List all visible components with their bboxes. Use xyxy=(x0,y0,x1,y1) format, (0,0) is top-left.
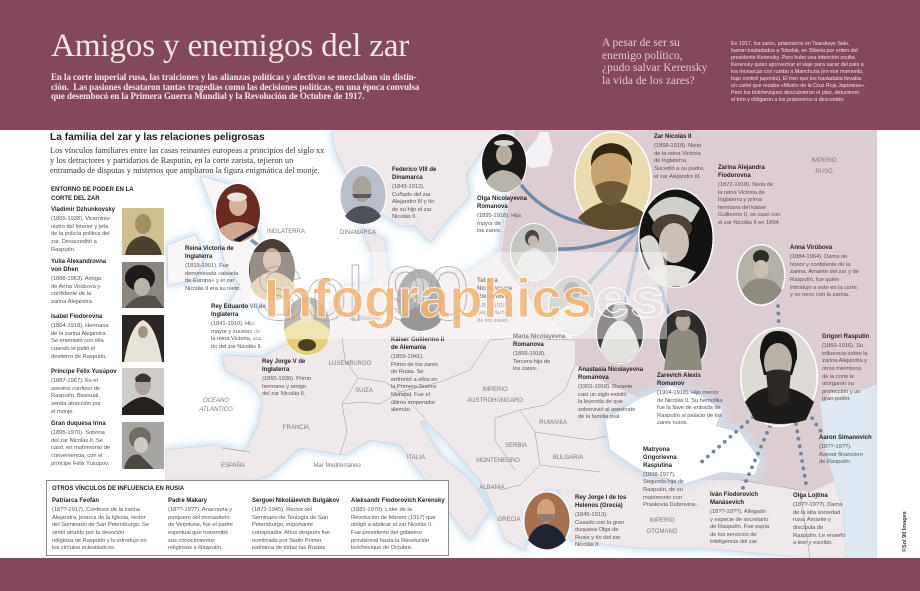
map labels: SERBIA xyxy=(505,443,527,449)
map labels: AUSTROHÚNGARO xyxy=(467,398,523,404)
profile: Feofán: religiosa de Rasputín y lo introdujo en xyxy=(52,538,147,544)
profile: Félix: sentía atracción por xyxy=(51,401,101,407)
profile: Makary: sus conocimientos xyxy=(168,538,215,544)
profile: Yulia xyxy=(51,258,106,305)
portrait: Isabel xyxy=(122,315,164,362)
profile: Makary: de Verjoturie, fue el padre xyxy=(168,522,233,528)
profile: Yulia: Yulia Alexandrovna xyxy=(51,259,106,265)
intro text: que desembocó en la Primera Guerra Mundial y la Revolución de Octubre de 1917. xyxy=(51,91,364,101)
bio: Alexis: Romanov xyxy=(657,381,684,387)
profile: Makary: Padre Makary xyxy=(168,498,207,504)
bio: María: los zares. xyxy=(513,366,537,372)
bio: Tatiana: de los zares. xyxy=(477,318,509,324)
profile: Dzhunkovsky: Vladimir Dzhunkovsky xyxy=(51,207,115,213)
panel heading: CORTE DEL ZAR xyxy=(51,196,100,202)
portrait: Olga Nicolayevna xyxy=(481,133,527,193)
bio: Iván xyxy=(710,492,770,545)
profile: Yulia: (1888-1963). Amiga xyxy=(51,276,101,282)
question: ¿pudo salvar Kerensky xyxy=(602,62,707,74)
portrait: Reina Victoria xyxy=(214,182,262,244)
bio: Aaron xyxy=(819,434,872,465)
bio: Alexis: de Nicolás II. Su hemofilia xyxy=(657,398,722,404)
bio: Olga Lojtina xyxy=(793,492,846,546)
bio: Anastasia: Romanova xyxy=(578,375,609,381)
bio: Alejandra: hermana del káiser xyxy=(718,205,766,211)
bio: Jorge I: Casado con la gran xyxy=(575,520,624,526)
map labels: ALEMANIA xyxy=(350,316,380,322)
credit: ©Sol 90 Images xyxy=(902,511,908,552)
bio: Federico VIII: Nicolás II. xyxy=(392,214,417,220)
watermark: Infographics xyxy=(264,267,592,329)
portrait: Rey Eduardo VII xyxy=(248,238,296,302)
panel heading xyxy=(51,186,134,202)
bio: Aaron: de Rasputín. xyxy=(819,459,851,465)
bio: Jorge V: hermano y amigo xyxy=(262,384,306,390)
bio: Olga Lojtina: (18??-19??). Dama xyxy=(793,502,842,508)
profile: Kerensky: (1881-1970). Líder de la xyxy=(351,507,412,513)
bio: Alejandra: la reina Victoria de xyxy=(718,190,765,196)
bottom band xyxy=(0,558,920,591)
bio: Iván: de Rasputín. Fue espía xyxy=(710,524,769,530)
profile: Bulgákov: Serguei Nikoláievich Bulgákov xyxy=(252,498,339,504)
bio: Eduardo VII: (1841-1910). Hijo xyxy=(211,321,255,327)
bio: Alexis: (1904-1918). Hijo menor xyxy=(657,390,719,396)
bio: Rasputín: Grigori Rasputín xyxy=(822,334,869,340)
bio: Tatiana: Romanova xyxy=(477,294,508,300)
portrait: Káiser Guillermo II xyxy=(396,268,444,332)
profile: Feofán: Alejandra, jerarca de la Iglesia, rector xyxy=(52,515,146,521)
bio: Anna: y se nexo con la zarina. xyxy=(790,292,850,298)
bio: Jorge I: duquesa Olga de xyxy=(575,527,618,533)
intro text xyxy=(51,72,420,101)
bio: Rasputín: protección y un xyxy=(822,389,860,395)
profile: Makary xyxy=(168,498,233,551)
profile: Félix: (1887-1967). Es el xyxy=(51,378,98,384)
bio: Iván: Manásevich xyxy=(710,500,744,506)
bio: Jorge V: (1865-1936). Primo xyxy=(262,376,311,382)
section heading: La familia del zar y las relaciones peligrosas xyxy=(50,132,265,143)
bio: María: María Nicolayevna xyxy=(513,334,565,340)
bio: Guillermo II: la Primera Guerra xyxy=(391,384,436,390)
profile: Dzhunkovsky: (1865-1938). Viceminis- xyxy=(51,216,111,222)
bio: Tatiana: Nicolayevna xyxy=(477,286,512,292)
map labels: OTOMANO xyxy=(647,529,677,535)
map labels: MONTENEGRO xyxy=(476,458,520,464)
map labels: ESPAÑA xyxy=(221,463,245,469)
map background xyxy=(122,130,877,558)
bio: Tatiana: Segunda hija xyxy=(477,310,510,316)
profile: Félix: Rasputín. Bisexual, xyxy=(51,393,100,399)
bio: Guillermo II: alemán. xyxy=(391,407,411,413)
bio: Jorge V: del zar Nicolás II. xyxy=(262,391,305,397)
profile: Isabel: cuando le pidió el xyxy=(51,346,95,352)
portrait: Zar Nicolás II xyxy=(574,131,652,231)
bio: Alejandra xyxy=(718,164,780,226)
map labels: IMPERIO xyxy=(811,158,837,164)
question: A pesar de ser su xyxy=(602,37,680,49)
bio: Victoria: Reina Victoria de xyxy=(185,246,234,252)
portrait: Tatiana Nicolayevna xyxy=(510,223,558,281)
bio: Nicolás II: (1868-1918). Nieto xyxy=(654,143,701,149)
connectors: Rasputin dotted links xyxy=(697,306,822,490)
profile: Irina: Gran duquesa Irina xyxy=(51,421,106,427)
profile: Feofán: (18??-1917). Confesor de la zarina xyxy=(52,507,140,513)
portrait: Federico VIII xyxy=(340,165,386,225)
section intro: entramado de disputas y misterios que ampliaron la figura enigmática del monje. xyxy=(50,166,320,175)
bio: Olga Lojtina: discípula de xyxy=(793,525,823,531)
bio: Nicolás II: Sucedió a su padre, xyxy=(654,166,704,172)
bio: Jorge I: Rusia y tío del zar xyxy=(575,535,620,541)
bio: Jorge V xyxy=(262,358,311,397)
profile: Yulia: de Anna Virúbova y xyxy=(51,284,100,290)
answer text: bajo control japonés). El tren que los trasladaba llevaba xyxy=(731,76,861,82)
bio: Jorge I: (1845-1913). xyxy=(575,512,608,518)
bio: Aaron: (18??-19??). xyxy=(819,444,852,450)
bio: Victoria: Nicolás II era su nieto. xyxy=(185,286,241,292)
map labels: BULGARIA xyxy=(553,455,583,461)
bio: Aaron: Aaron Simanovich xyxy=(819,435,872,441)
bio: Anna: honor y confidente de la xyxy=(790,262,850,268)
question: la vida de los zares? xyxy=(602,75,695,87)
watermark: es xyxy=(595,267,665,329)
bio: Anastasia: Anastasia Nicolayevna xyxy=(578,367,643,373)
top band xyxy=(0,0,920,130)
bio: Jorge I xyxy=(575,494,626,548)
profile: Yulia: zarina Alejandra. xyxy=(51,299,93,305)
bio: Nicolás II xyxy=(654,134,704,180)
watermark: Sol 90 xyxy=(254,252,470,337)
bio: Matryona: Rasputín, de su xyxy=(643,487,683,493)
answer text: los monarcas con rumbo a Manchuria (en ese momento, xyxy=(731,69,864,75)
bio: María: Romanova xyxy=(513,342,544,348)
bio: Alexis: fue la llave de entrada de xyxy=(657,405,721,411)
profile: Feofán: del Seminario de San Petersburgo. Se xyxy=(52,522,149,528)
bio: Olga Lojtina: rusa. Amante y xyxy=(793,517,831,523)
bio: Matryona: (1898-1977). xyxy=(643,472,676,478)
bio: Victoria: denominada «abuela xyxy=(185,271,238,277)
panel heading: ENTORNO DE PODER EN LA xyxy=(51,187,134,193)
portrait: Grigori Rasputín xyxy=(740,327,818,427)
profile: Kerensky: Aleksandr Fiodorovich Kerensky xyxy=(351,498,445,504)
bio: Nicolás II: Zar Nicolás II xyxy=(654,134,691,140)
connector: Victoria to Eduardo xyxy=(251,240,262,248)
bio: Guillermo II xyxy=(391,336,444,413)
bio: Eduardo VII xyxy=(211,304,266,350)
map labels: RUSO xyxy=(815,169,833,175)
bio: Rasputín: otros miembros xyxy=(822,366,861,372)
bio: Anastasia: (1901-1918). Durante xyxy=(578,384,632,390)
portrait: Rey Jorge V xyxy=(283,296,331,356)
profile: Bulgákov: Seminario de Teología de San xyxy=(252,515,328,521)
profile: Félix: asesino confeso de xyxy=(51,386,100,392)
profile: Bulgákov xyxy=(252,498,340,551)
profile: Makary: espiritual que transmitió xyxy=(168,530,228,536)
portrait: María Nicolayevna xyxy=(548,276,596,336)
bio: Alejandra: Inglaterra y prima xyxy=(718,197,762,203)
bio: Olga xyxy=(477,196,527,234)
bio: Jorge I: Helenos (Grecia) xyxy=(575,503,623,509)
bio: Jorge I: Rey Jorge I de los xyxy=(575,495,626,501)
profile: Yulia: confidente de la xyxy=(51,291,91,297)
bio: Olga: Romanova xyxy=(477,204,508,210)
bio: Rasputín: de la corte le xyxy=(822,374,854,380)
bio: Guillermo II: último emperador xyxy=(391,400,435,406)
profile: Dzhunkovsky: de la policía política del xyxy=(51,231,110,237)
map labels: ALBANIA xyxy=(479,485,505,491)
portrait: Irina xyxy=(122,422,164,469)
profile: Dzhunkovsky: nistro del Interior y jefa xyxy=(51,224,108,230)
profile: Dzhunkovsky: zar. Desacreditó a xyxy=(51,239,97,245)
bio: Jorge I: Nicolás II. xyxy=(575,542,600,548)
bio: Anastasia: de la familia real. xyxy=(578,414,621,420)
profile: Isabel: Se enemistó con ella xyxy=(51,338,104,344)
portrait: Anastasia Nicolayevna xyxy=(596,302,644,364)
bio: Jorge V: Inglaterra xyxy=(262,367,289,373)
map labels: RUMANIA xyxy=(539,420,567,426)
profile: Irina: casó, en matrimonio de xyxy=(51,445,110,451)
profile: Dzhunkovsky xyxy=(51,206,115,253)
bio: Matryona xyxy=(643,446,697,508)
profile: Bulgákov: Petersburgo, importante xyxy=(252,522,313,528)
question: enemigo político, xyxy=(602,50,682,62)
profile: Kerensky: Fue presidente del gobierno xyxy=(351,530,422,536)
bio: Olga: Olga Nicolayevna xyxy=(477,196,527,202)
bio: Guillermo II: de Alemania xyxy=(391,345,426,351)
bio: Victoria: de Europa» y el zar xyxy=(185,278,234,284)
bio: Iván: de los servicios de xyxy=(710,532,757,538)
profile: Irina: príncipe Félix Yusúpov. xyxy=(51,461,109,467)
bio: Anna: (1884-1964). Dama de xyxy=(790,254,847,260)
map labels: IMPERIO xyxy=(649,518,675,524)
map labels: IMPERIO xyxy=(482,387,508,393)
bio: Guillermo II: de Rusia. Se xyxy=(391,369,424,375)
panel: entorno de poder xyxy=(51,186,134,467)
bio: Anna: zarina. Amante del zar y de xyxy=(790,269,859,275)
profile: Irina: conveniencia, con el xyxy=(51,453,102,459)
profile: Irina: (1895-1970). Sobrina xyxy=(51,430,105,436)
profile: Feofán: los círculos eclesiásticos. xyxy=(52,545,115,551)
bio: Federico VIII: Alejandro III y tío xyxy=(392,199,434,205)
bio: Victoria xyxy=(185,246,241,292)
profile: Kerensky: provisional hasta la Revolución xyxy=(351,538,429,544)
profile: Isabel: (1864-1918). Hermana xyxy=(51,323,109,329)
profile: Bulgákov: patriarca de todas las Rusias. xyxy=(252,545,327,551)
intro text: ción. Las pasiones desataron tantas tragedias como las decisiones políticas, en una época convulsa xyxy=(51,82,419,92)
map labels: INGLATERRA xyxy=(267,229,305,235)
map labels: SUIZA xyxy=(355,388,373,394)
map labels: DINAMARCA xyxy=(340,230,376,236)
profile: Félix: Príncipe Félix Yusúpov xyxy=(51,369,117,375)
bio: Olga Lojtina: a leer y escribir. xyxy=(793,540,832,546)
bio: Anna: Anna Virúbova xyxy=(790,245,832,251)
profile: Isabel: Isabel Fiodorovna xyxy=(51,314,102,320)
bio: Iván: inteligencia del zar. xyxy=(710,539,758,545)
profile: Isabel: de la zarina Alejandra. xyxy=(51,331,107,337)
panel heading: OTROS VÍNCULOS DE INFLUENCIA EN RUSIA xyxy=(52,486,184,492)
portrait: Zarina Alejandra xyxy=(638,188,714,288)
bio: María: Tercera hija de xyxy=(513,359,550,365)
bio: Eduardo VII: Rey Eduardo VII de xyxy=(211,304,266,310)
profile: Irina xyxy=(51,420,110,467)
bio: Rasputín: (1869-1916). Su xyxy=(822,343,863,349)
bio: Federico VIII: Dinamarca xyxy=(392,175,423,181)
answer text: fueron trasladados a Tobolsk, en Siberia por orden del xyxy=(731,48,858,54)
bio: Anna: Rasputín, fue quien xyxy=(790,277,839,283)
bio: Anastasia: sobrevivió al asesinato xyxy=(578,407,635,413)
bio: Tatiana xyxy=(477,278,512,324)
bio: Olga: (1895-1918). Hija xyxy=(477,213,521,219)
answer text: un cartel que rezaba «Misión de la Cruz Roja Japonesa». xyxy=(731,83,866,89)
profile: Dzhunkovsky: Rasputín. xyxy=(51,247,75,253)
map labels: LUXEMBURGO xyxy=(329,361,371,367)
bio: Anastasia: la leyenda de que xyxy=(578,399,623,405)
portrait: Yulia xyxy=(122,262,164,308)
bio: María: (1899-1918). xyxy=(513,351,546,357)
portrait: Zarevich Alexis xyxy=(658,309,708,371)
bio: Rasputín: influencia sobre la xyxy=(822,351,868,357)
bio: Eduardo VII: tío del zar Nicolás II. xyxy=(211,344,262,350)
profile: Kerensky xyxy=(351,498,445,551)
profile: Isabel xyxy=(51,314,109,360)
answer text: Kerensky quiso aprovechar el viaje para sacar del país a xyxy=(731,62,864,68)
bio: Nicolás II: de Inglaterra. xyxy=(654,158,687,164)
section intro: Los vínculos familiares entre las casas reinantes europeas a principios del siglo xx xyxy=(50,146,324,155)
bio: Eduardo VII: Inglaterra xyxy=(211,312,238,318)
bio: Jorge V: Rey Jorge V de xyxy=(262,359,305,365)
bio: Rasputín xyxy=(822,334,869,402)
bio: Olga: los zares. xyxy=(477,228,501,234)
bio: Guillermo II: Primo de los zares xyxy=(391,362,438,368)
bio: Anna xyxy=(790,244,859,298)
bio: Aaron: Asesor financiero xyxy=(819,452,863,458)
portrait: Felix xyxy=(122,368,164,415)
bio: Matryona: Segunda hija de xyxy=(643,479,684,485)
portrait: Anna Virúbova xyxy=(736,244,786,306)
answer text: el tren y obligaron a los prisioneros a descender. xyxy=(731,97,844,103)
profile: Yulia: von Dhen xyxy=(51,267,78,273)
profile: Bulgákov: conspirador. Años después fue xyxy=(252,530,330,536)
answer text: presidente Kerensky. Pero hubo una intención oculta. xyxy=(731,55,856,61)
bio: Anastasia xyxy=(578,366,644,420)
profile: Bulgákov: nombrado por Stalin Primer xyxy=(252,538,321,544)
profile: Makary: porquero del monasterio xyxy=(168,515,230,521)
bio: Matryona: Rasputina xyxy=(643,463,672,469)
portrait: Dzhunkovsky xyxy=(122,208,164,255)
intro text: En la corte imperial rusa, las traiciones y las alianzas políticas y afectivas se mezclaban sin distin- xyxy=(51,72,416,82)
profile: Kerensky: bolchevique de Octubre. xyxy=(351,545,413,551)
bio: Matryona: Grigorievna xyxy=(643,455,677,461)
title: Amigos y enemigos del zar xyxy=(51,27,409,64)
profile: Makary: (18??-19??). Anacoreta y xyxy=(168,507,232,513)
bio: Federico VIII: (1843-1912). xyxy=(392,184,425,190)
profile: Irina: del zar Nicolás II. Se xyxy=(51,438,103,444)
bio: Federico VIII: Cuñado del zar xyxy=(392,192,431,198)
connectors: children and parents xyxy=(522,186,668,312)
bio: Iván: (18??-19??). Allegado xyxy=(710,509,766,515)
bio: Guillermo II: Káiser Guillermo II xyxy=(391,337,444,343)
map labels: GRECIA xyxy=(497,517,521,523)
profile: Kerensky: Revolución de febrero (1917) que xyxy=(351,515,436,521)
bio: Alexis: Zarevich Alexis xyxy=(657,373,701,379)
profile: Isabel: destierro de Rasputín. xyxy=(51,354,107,360)
bio: Rasputín: gran poder. xyxy=(822,396,851,402)
answer text xyxy=(731,41,866,103)
answer text: Pero los bolcheviques descubrieron el plan, detuvieron xyxy=(731,90,859,96)
bio: Eduardo VII: la reina Victoria, era xyxy=(211,336,261,342)
profile: Feofán: Patriarca Feofán xyxy=(52,498,99,504)
map labels: FRANCIA xyxy=(283,425,309,431)
bio: Alexis: Rasputín al palacio de los xyxy=(657,413,722,419)
bio: Alejandra: Zarina Alejandra xyxy=(718,165,765,171)
bio: Iván: Iván Fiodorovich xyxy=(710,492,758,498)
bio: Guillermo II: (1859-1941). xyxy=(391,354,424,360)
bio: Nicolás II: el zar Alejandro III. xyxy=(654,174,701,180)
bio: Anna: introdujo a este en la corte, xyxy=(790,285,858,291)
bio: Federico VIII: Federico VIII de xyxy=(392,167,436,173)
profile: Makary: religiosos a Rasputín. xyxy=(168,545,222,551)
bio: Olga Lojtina: de la alta sociedad xyxy=(793,510,840,516)
bio: Tatiana: Tatiana xyxy=(477,278,498,284)
bio: Federico VIII xyxy=(392,166,436,220)
profile: Félix: el monje. xyxy=(51,409,74,415)
bio: Tatiana: (1897-1918). xyxy=(477,303,510,309)
profile: Félix xyxy=(51,368,117,415)
bio: Alejandra: (1872-1918). Nieta de xyxy=(718,182,773,188)
bio: Alejandra: Guillermo II, se casó con xyxy=(718,212,780,218)
bio: Alexis: zares rusos. xyxy=(657,420,688,426)
map labels: Mar Mediterráneo xyxy=(313,463,361,469)
map labels: ITALIA xyxy=(407,455,425,461)
question xyxy=(602,37,708,87)
profile: Bulgákov: (1871-1945). Rector del xyxy=(252,507,312,513)
bio: Alejandra: Fiodorovna xyxy=(718,173,751,179)
left column portraits xyxy=(122,208,164,469)
bio: Matryona: matrimonio con xyxy=(643,495,682,501)
panel: otros vínculos xyxy=(46,480,449,556)
bio: Federico VIII: de su hijo el zar xyxy=(392,207,432,213)
bio: Olga Lojtina: Olga Lojtina xyxy=(793,493,828,499)
bio: Victoria: (1819-1901). Fue xyxy=(185,263,229,269)
bio: Rasputín: otorgaron su xyxy=(822,381,854,387)
map labels: OCEANO xyxy=(203,398,229,404)
bio: Matryona: Praskovia Dubrovina. xyxy=(643,502,697,508)
bio: María xyxy=(513,334,566,372)
section intro xyxy=(50,146,324,175)
profile: Kerensky: obligó a abdicar al zar Nicolás II. xyxy=(351,522,433,528)
bio: Anastasia: casi un siglo existió xyxy=(578,392,627,398)
bio: Victoria: Inglaterra xyxy=(185,254,212,260)
portrait: Rey Jorge I xyxy=(523,491,571,551)
bio: Guillermo II: enfrentó a ellos en xyxy=(391,377,438,383)
bio: Alejandra: el zar Nicolás II en 1894. xyxy=(718,220,780,226)
bio: Guillermo II: Mundial. Fue el xyxy=(391,392,430,398)
answer text: En 1917, los zares, prisioneros en Tsarskoye Selo, xyxy=(731,41,849,47)
bio: Olga: mayor de xyxy=(477,221,501,227)
section intro: y los detractores y partidarios de Rasputín, en la corte zarista, tejieron un xyxy=(50,156,293,165)
map labels: ATLANTICO xyxy=(199,406,233,412)
bio: Eduardo VII: mayor y sucesor de xyxy=(211,329,261,335)
bio: Olga Lojtina: Rasputín. Le enseñó xyxy=(793,533,845,539)
profile: Feofán: sintió atraído por la devoción xyxy=(52,530,124,536)
bio: Alexis xyxy=(657,372,722,426)
bio: Matryona: Matryona xyxy=(643,447,670,453)
bio: Nicolás II: de la reina Victoria xyxy=(654,151,701,157)
bio: Iván: y especie de secretario xyxy=(710,517,768,523)
profile: Feofán xyxy=(52,498,149,551)
bio: Rasputín: zarina Alejandra y xyxy=(822,358,867,364)
